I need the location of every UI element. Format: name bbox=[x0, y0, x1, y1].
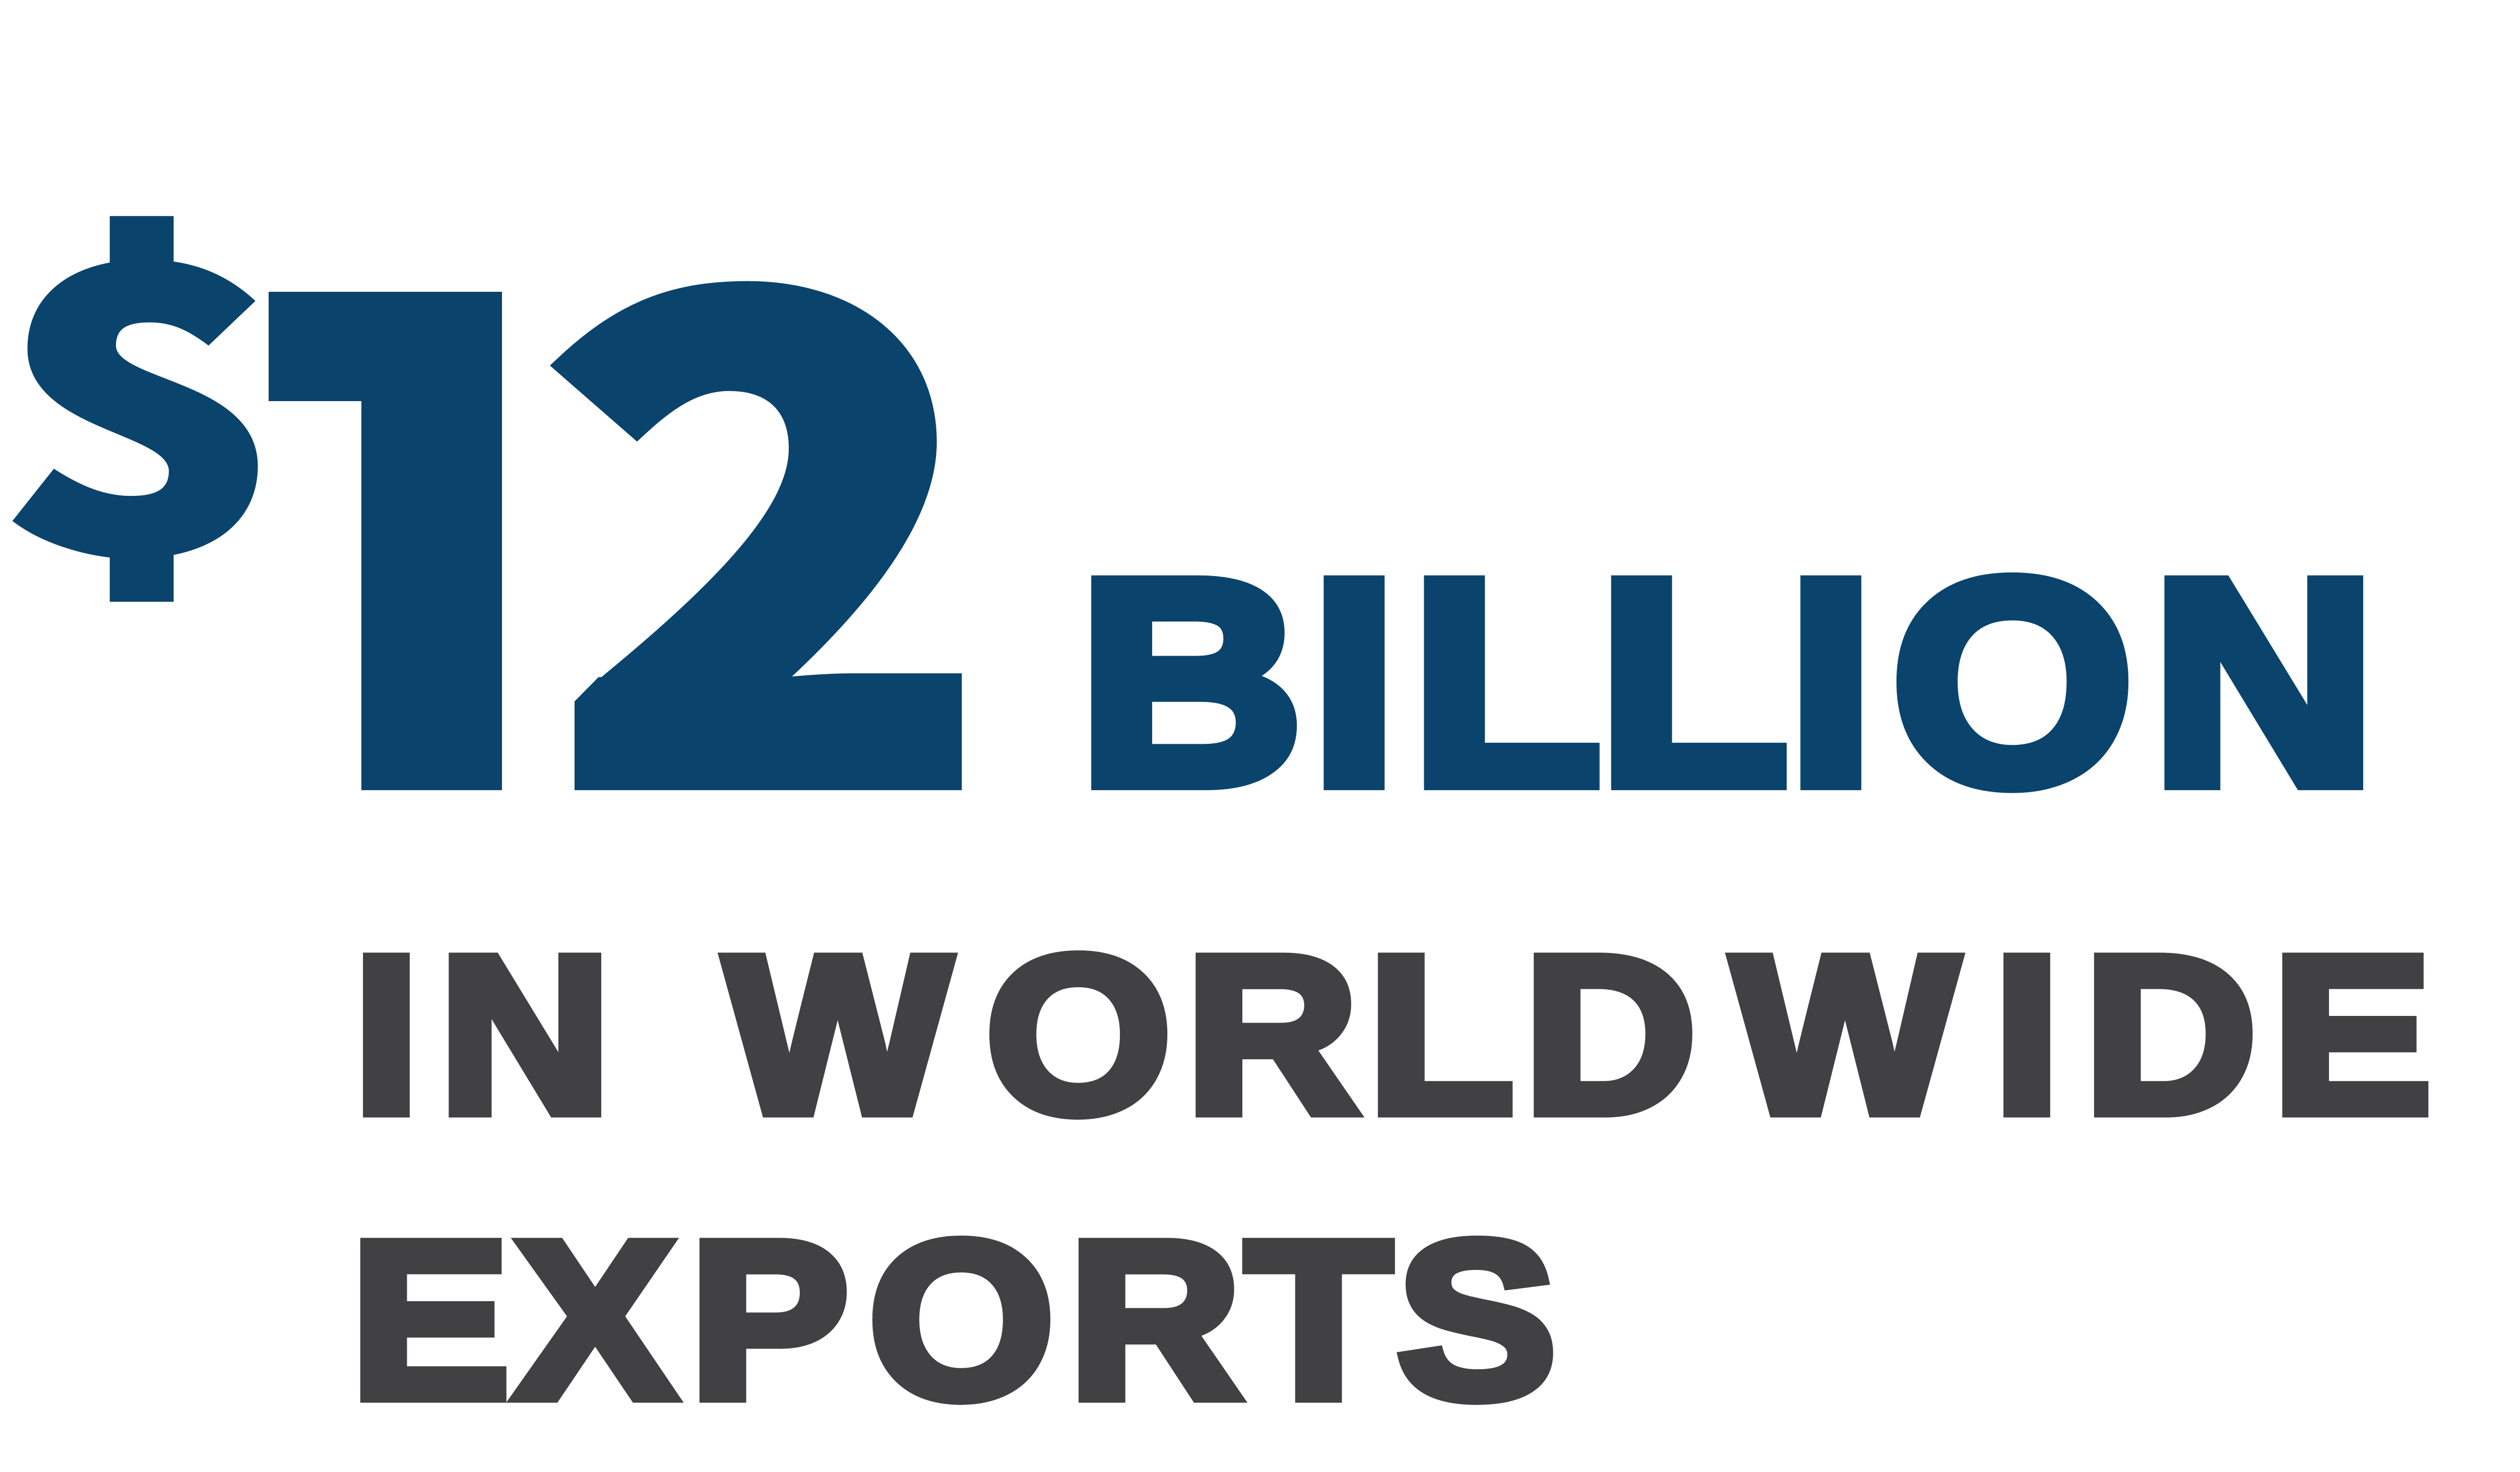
caption line: IN WORLDWIDE: IN WORLDWIDE bbox=[353, 910, 2431, 1159]
number 12: 12 bbox=[194, 32, 988, 966]
caption line: EXPORTS: EXPORTS bbox=[350, 1195, 1556, 1444]
headline figure: $12 bbox=[12, 216, 962, 790]
flag of the numeral 1 bbox=[269, 292, 420, 401]
unit: BILLION: BILLION bbox=[1079, 521, 2376, 845]
dollar sign: $ bbox=[0, 101, 286, 662]
